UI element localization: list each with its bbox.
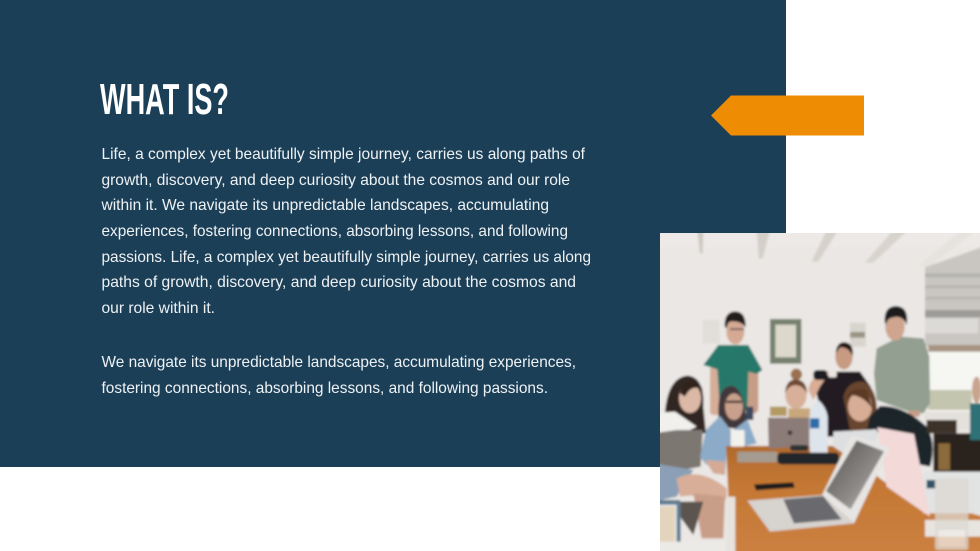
text block: first paragraph [101, 146, 591, 317]
title: WHAT IS? [100, 75, 229, 124]
text block: second paragraph [102, 354, 576, 397]
text block: first paragraph: within it. We navigate its unpredictable landscapes, accumulating [101, 197, 549, 214]
drinking glasses [935, 478, 968, 550]
table clutter [923, 472, 980, 537]
text block: first paragraph: passions. Life, a complex yet beautifully simple journey, carries us along [102, 249, 591, 266]
text block: first paragraph: Life, a complex yet beautifully simple journey, carries us along paths of [102, 146, 586, 163]
silver laptop [747, 435, 890, 532]
person: standing man in green shirt [703, 311, 762, 420]
phone [754, 482, 795, 490]
papers and cable box [737, 452, 777, 462]
text block: first paragraph: paths of growth, discovery, and deep curiosity about the cosmos and [102, 274, 576, 291]
arrow: orange pointer [711, 96, 864, 136]
person: woman with glasses in denim shirt [700, 386, 757, 475]
text block: second paragraph: We navigate its unpredictable landscapes, accumulating experiences, [102, 354, 576, 371]
person: woman in black top [808, 342, 873, 437]
text block: first paragraph: growth, discovery, and deep curiosity about the cosmos and our role [102, 172, 570, 189]
text block: first paragraph: experiences, fostering connections, absorbing lessons, and following [102, 223, 568, 240]
table [726, 446, 980, 551]
person: woman with long dark hair on left [653, 376, 727, 543]
pink laptop [877, 427, 930, 517]
laptop: grey macbook back [768, 418, 809, 448]
chair back behind the laptop [770, 407, 787, 416]
person: woman in dark jacket leaning [843, 377, 980, 475]
cup [731, 430, 745, 447]
text block: first paragraph: our role within it. [102, 300, 215, 317]
photo: team around a table [653, 227, 980, 551]
panel: navy background [0, 0, 786, 467]
framed picture [770, 319, 801, 364]
person: man in grey sweater [874, 306, 930, 417]
person: woman with bun behind laptop [785, 369, 810, 418]
water bottle [809, 400, 828, 453]
text block: second paragraph: fostering connections, absorbing lessons, and following passions. [102, 380, 548, 397]
floor item [660, 540, 682, 545]
